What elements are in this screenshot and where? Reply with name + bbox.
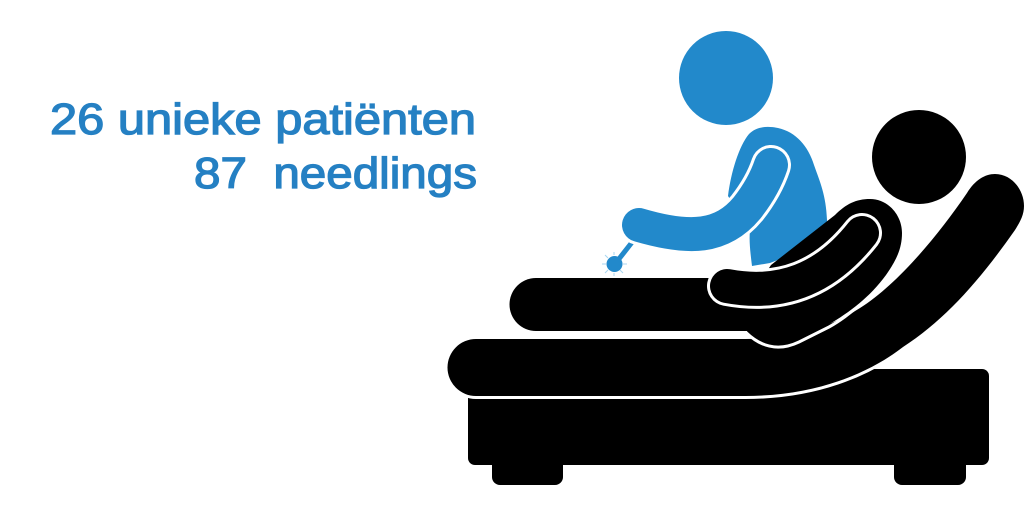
therapist head [679,31,773,125]
title text: patient and needling counts: 87 needlings [194,149,477,198]
title text: patient and needling counts [50,95,477,198]
patient lower body [510,278,750,331]
title text: patient and needling counts: 26 unieke patiënten [50,95,476,144]
therapist arm with white outline [639,165,771,234]
icon: bed base with feet [468,369,989,485]
needle with glow [602,241,633,276]
patient torso lower outline [746,305,860,347]
patient torso [747,199,902,345]
patient arm with white outline [727,233,862,289]
patient head [872,110,966,204]
icon: reclining mattress [447,174,1024,396]
icon: therapist figure in blue [602,31,829,276]
icon: patient figure in black [510,110,966,347]
therapist torso [728,127,829,266]
